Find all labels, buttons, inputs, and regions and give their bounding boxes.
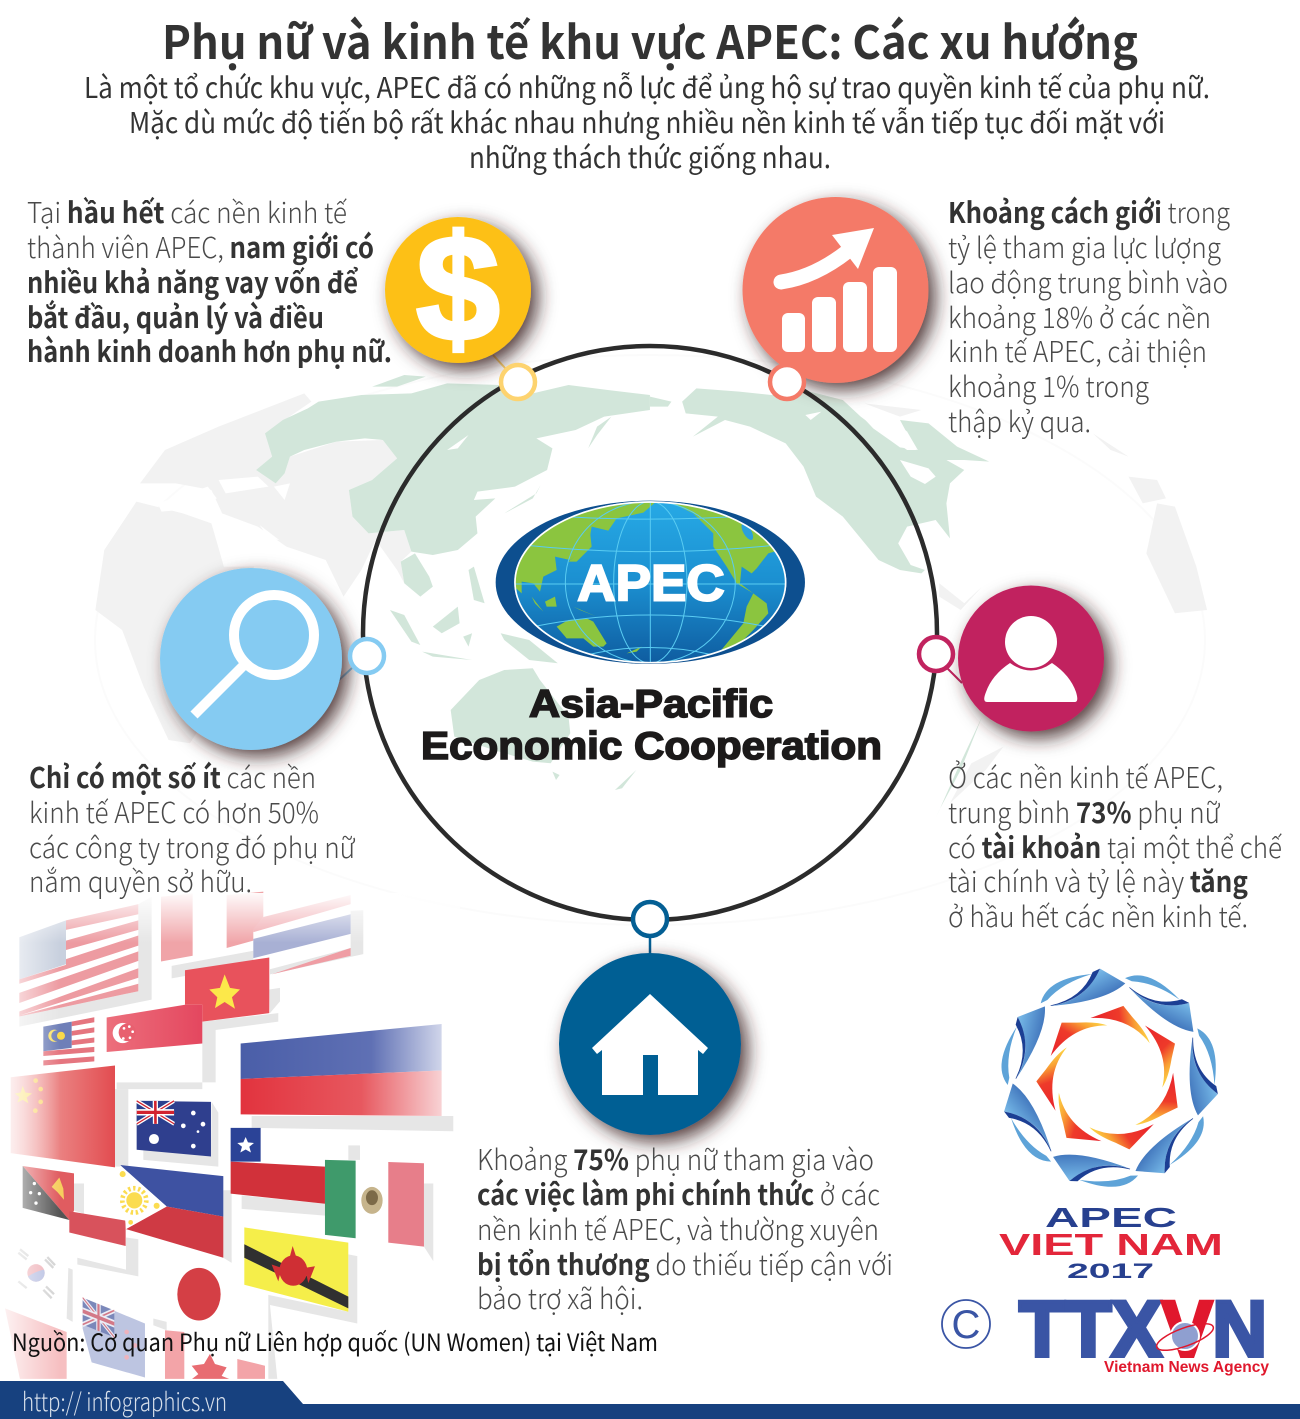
flag: partly hidden red bottom left [5,1308,67,1379]
footer bar: http:// infographics.vn [22,1383,227,1419]
flag: Chile [231,1128,325,1204]
Asia-Pacific Economic Cooperation label [421,683,882,768]
flag: New Zealand [83,1298,145,1378]
intro text [84,66,1210,177]
flag shadows [19,897,453,1379]
icon: magnifier [160,568,384,750]
text: bottom: nền kinh tế APEC, và thường xuyên [477,1208,879,1249]
text: middle left: kinh tế APEC có hơn 50% [29,791,319,832]
intro text: những thách thức giống nhau. [469,136,831,177]
text: middle right: có tài khoản tại một thể chế [948,826,1283,867]
text: middle left: các công ty trong đó phụ nữ [29,826,355,867]
text: top right: thập kỷ qua. [948,400,1091,441]
icon: person [919,586,1104,732]
flag: Brunei [244,1227,348,1312]
APEC logo: APEC [577,555,725,612]
TTXVN logo: TTXVN [1019,1284,1267,1373]
flags collage [5,892,453,1379]
footer bar [0,1381,1300,1419]
flag: Singapore [107,1005,202,1052]
text: top right: khoảng 1% trong [948,365,1149,406]
icon: house [559,902,741,1135]
main circle ring [363,346,937,920]
flag: USA [19,904,138,1017]
flag: Japan [177,1268,221,1321]
flag: Vietnam [185,957,269,1022]
intro text: Mặc dù mức độ tiến bộ rất khác nhau nhưng nhiều nền kinh tế vẫn tiếp tục đối mặt với [129,101,1165,142]
text: middle right: trung bình 73% phụ nữ [948,791,1220,832]
text: bottom: bảo trợ xã hội. [477,1277,643,1318]
text: bottom [477,1138,893,1318]
copyright symbol [942,1300,990,1348]
text: top right [948,191,1230,441]
text: middle right: ở hầu hết các nền kinh tế. [948,895,1248,936]
flag: Mexico [325,1160,424,1247]
text: middle right [948,756,1283,936]
icon: dollar: $ [416,204,500,372]
APEC Viet Nam 2017 logo [981,957,1231,1283]
text: top right: tỷ lệ tham gia lực lượng [948,226,1221,267]
flag: Russia [241,1024,442,1116]
text: middle right: Ở các nền kinh tế APEC, [948,756,1223,797]
source line: Nguồn: Cơ quan Phụ nữ Liên hợp quốc (UN Women) tại Việt Nam [12,1323,658,1358]
flag: Malaysia [43,1017,94,1065]
text: top right: Khoảng cách giới trong [948,191,1230,232]
Asia-Pacific Economic Cooperation label: Economic Cooperation [421,725,882,768]
text: bottom: bị tổn thương do thiếu tiếp cận với [477,1243,893,1284]
text: middle right: tài chính và tỷ lệ này tăng [948,860,1248,901]
text: middle left: Chỉ có một số ít các nền [29,756,316,797]
APEC logo [496,498,805,667]
text: top left [27,191,392,371]
seas cut out of the map [158,477,290,567]
flag: China [11,1065,115,1167]
flag: Australia [137,1101,211,1157]
text: top left: hành kinh doanh hơn phụ nữ. [27,330,392,371]
inland sea and lake cut-outs [447,435,469,450]
text: top left: bắt đầu, quản lý và điều [27,296,324,337]
text: bottom: Khoảng 75% phụ nữ tham gia vào [477,1138,874,1179]
flag: Papua New Guinea [23,1166,126,1246]
title: Phụ nữ và kinh tế khu vực APEC: Các xu hướng [162,7,1138,73]
flag: South Korea [18,1249,55,1298]
flag: Canada bottom [165,1330,265,1379]
text: top right: khoảng 18% ở các nền [948,296,1211,337]
text: bottom: các việc làm phi chính thức ở các [477,1173,880,1214]
APEC Viet Nam 2017 logo: 2017 [1067,1260,1154,1283]
text: top left: nhiều khả năng vay vốn để [27,261,358,302]
text: top right: kinh tế APEC, cải thiện [948,330,1207,371]
icon: growth chart [742,197,928,399]
APEC Viet Nam 2017 logo: APEC [1045,1202,1177,1233]
copyright symbol: C [952,1303,980,1347]
intro text: Là một tổ chức khu vực, APEC đã có những nỗ lực để ủng hộ sự trao quyền kinh tế của phụ nữ. [84,66,1210,107]
Asia-Pacific Economic Cooperation label: Asia-Pacific [529,683,773,726]
text: top left: thành viên APEC, nam giới có [27,226,374,267]
flag: Philippines [120,1165,223,1258]
background world map [95,355,1207,925]
text: middle left [29,756,355,901]
text: middle left: nắm quyền sở hữu. [29,860,252,901]
APEC Viet Nam 2017 logo: VIET NAM [999,1227,1223,1262]
text: top right: lao động trung bình vào [948,261,1228,302]
TTXVN logo: Vietnam News Agency [1104,1359,1269,1376]
flags fade overlays [0,893,460,1380]
flag: Canada top [161,892,263,962]
icon: dollar [385,204,535,399]
flag: Thailand [253,895,351,974]
text: top left: Tại hầu hết các nền kinh tế [27,191,348,232]
